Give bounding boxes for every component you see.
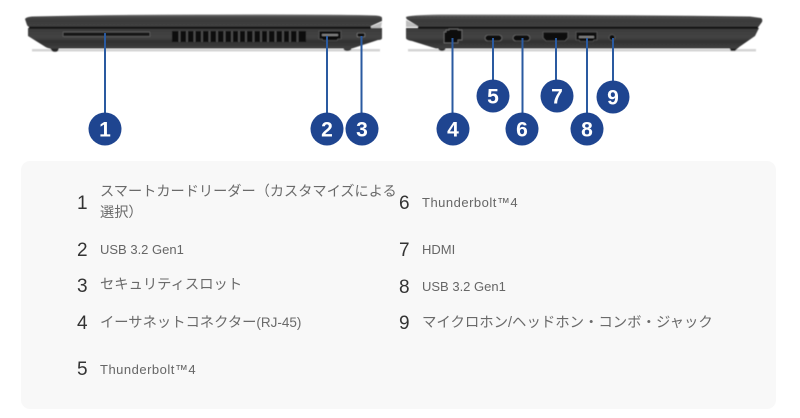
legend number 2: 2 <box>77 240 88 261</box>
security slot <box>357 33 365 37</box>
callout 9: 9 <box>607 86 619 110</box>
callout 7: 7 <box>551 86 563 108</box>
legend text 2: USB 3.2 Gen1 <box>100 242 184 257</box>
legend text 9: マイクロホン/ヘッドホン・コンボ・ジャック <box>422 314 713 330</box>
callout 3 <box>346 36 378 146</box>
legend number 6: 6 <box>399 193 410 214</box>
callout 4 <box>436 38 470 146</box>
callout 2: 2 <box>321 118 333 142</box>
usb port 8 <box>576 32 597 42</box>
callout 5 <box>476 38 510 112</box>
legend text 4: イーサネットコネクター(RJ-45) <box>100 315 301 331</box>
callout 6 <box>506 38 538 146</box>
callout 8 <box>570 38 604 146</box>
thunderbolt port 6 <box>513 35 530 41</box>
legend text 1: スマートカードリーダー（カスタマイズによる <box>100 184 397 200</box>
panel: port legend <box>21 161 776 409</box>
callout 7 <box>540 38 574 112</box>
legend number 8: 8 <box>399 277 410 298</box>
legend text 3: セキュリティスロット <box>100 277 242 293</box>
thunderbolt port 5 <box>485 35 502 41</box>
legend number 3: 3 <box>77 276 88 297</box>
callout 1: 1 <box>99 118 111 142</box>
laptop left side <box>25 14 382 52</box>
card slot <box>63 32 150 36</box>
legend text 8: USB 3.2 Gen1 <box>422 279 506 294</box>
callout 3: 3 <box>356 118 368 142</box>
callout 5: 5 <box>487 86 499 108</box>
rj45 port <box>444 29 462 43</box>
laptop side views with callouts <box>24 14 763 146</box>
callout 2 <box>310 36 344 146</box>
legend number 9: 9 <box>399 313 410 334</box>
legend text 1 <box>100 184 397 220</box>
legend number 7: 7 <box>399 240 410 261</box>
callout 1 <box>88 33 122 146</box>
hdmi port <box>543 32 568 41</box>
legend text 5: Thunderbolt™4 <box>100 362 196 377</box>
legend text 7: HDMI <box>422 242 455 257</box>
legend number 1: 1 <box>77 193 88 214</box>
usb port <box>319 31 341 40</box>
laptop right side <box>406 14 762 52</box>
audio jack <box>609 34 615 40</box>
legend number 5: 5 <box>77 359 88 380</box>
callout 6: 6 <box>516 118 528 142</box>
legend text 6: Thunderbolt™4 <box>422 195 518 210</box>
legend number 4: 4 <box>77 313 88 334</box>
callout 9 <box>596 38 630 114</box>
callout 4: 4 <box>447 118 459 142</box>
callout 8: 8 <box>581 118 593 142</box>
vents <box>172 31 306 42</box>
legend text 1: 選択） <box>100 204 143 220</box>
